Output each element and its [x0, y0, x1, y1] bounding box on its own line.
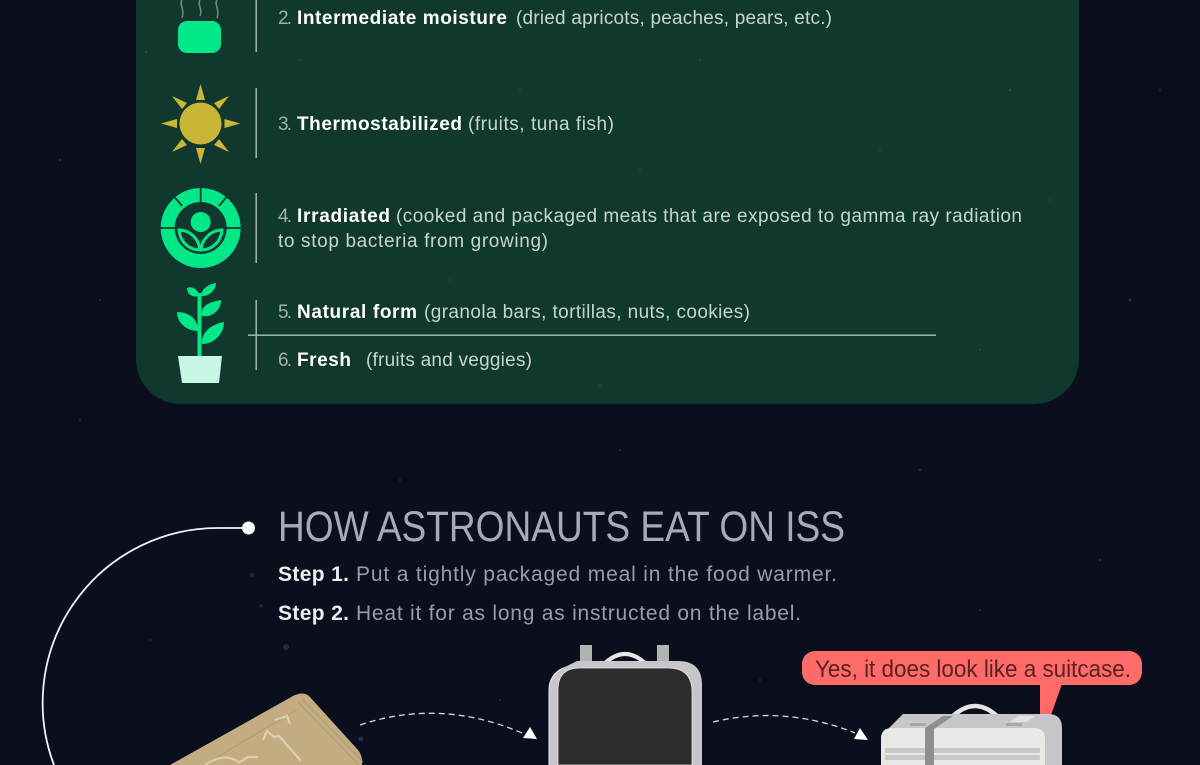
- heading: how astronauts eat on ISS: HOW ASTRONAUTS EAT ON ISS: [278, 503, 845, 551]
- text: item 3: 3.: [278, 114, 292, 135]
- text: step 1: Put a tightly packaged meal in the food warmer.: [356, 563, 837, 586]
- text: item 3: Thermostabilized: [297, 114, 462, 135]
- text: item 3: (fruits, tuna fish): [468, 114, 614, 135]
- text: step 2: Step 2.: [278, 602, 349, 625]
- illustration: food warmer: [549, 645, 702, 765]
- text: item 6: [278, 350, 532, 371]
- text: item 2: 2.: [278, 8, 292, 29]
- text: item 6: 6.: [278, 350, 292, 371]
- divider: item 3: [256, 88, 257, 158]
- text: item 5: (granola bars, tortillas, nuts, cookies): [424, 302, 750, 323]
- text: item 4: 4.: [278, 206, 292, 227]
- icon: potted plant: [177, 283, 224, 383]
- divider: item 4: [256, 193, 257, 263]
- callout: suitcase speech bubble: Yes, it does look like a suitcase.: [815, 656, 1131, 683]
- divider: item 2: [256, 0, 257, 52]
- text: item 6: (fruits and veggies): [366, 350, 532, 371]
- panel: food types: [136, 0, 1079, 404]
- text: item 3: [278, 114, 614, 135]
- arrow: packet to warmer: [360, 713, 537, 739]
- illustration: suitcase: [881, 706, 1062, 765]
- callout: suitcase speech bubble: [802, 651, 1142, 715]
- text: item 4: [278, 206, 1022, 252]
- icon: irradiated symbol: [160, 188, 241, 268]
- text: item 6: Fresh: [297, 350, 351, 371]
- text: item 4: (cooked and packaged meats that are exposed to gamma ray radiation: [396, 206, 1022, 227]
- text: item 5: 5.: [278, 302, 292, 323]
- text: item 2: [278, 8, 832, 29]
- curved connector with dot: [43, 522, 255, 765]
- illustration: food packet: [170, 694, 363, 765]
- divider: items 5 and 6: [256, 300, 257, 370]
- icon: intermediate moisture food with steam: [178, 0, 221, 53]
- text: step 2: Heat it for as long as instructed on the label.: [356, 602, 801, 625]
- text: item 5: Natural form: [297, 302, 417, 323]
- text: item 2: (dried apricots, peaches, pears, etc.): [516, 8, 832, 29]
- horizontal rule between items 5 and 6: [248, 334, 936, 336]
- text: item 4: Irradiated: [297, 206, 390, 227]
- text: item 5: [278, 302, 750, 323]
- text: step 1: Step 1.: [278, 563, 349, 586]
- text: item 2: Intermediate moisture: [297, 8, 507, 29]
- icon: thermostabilized sun: [161, 84, 240, 164]
- arrow: warmer to suitcase: [713, 716, 868, 740]
- text: item 4: to stop bacteria from growing): [278, 231, 548, 252]
